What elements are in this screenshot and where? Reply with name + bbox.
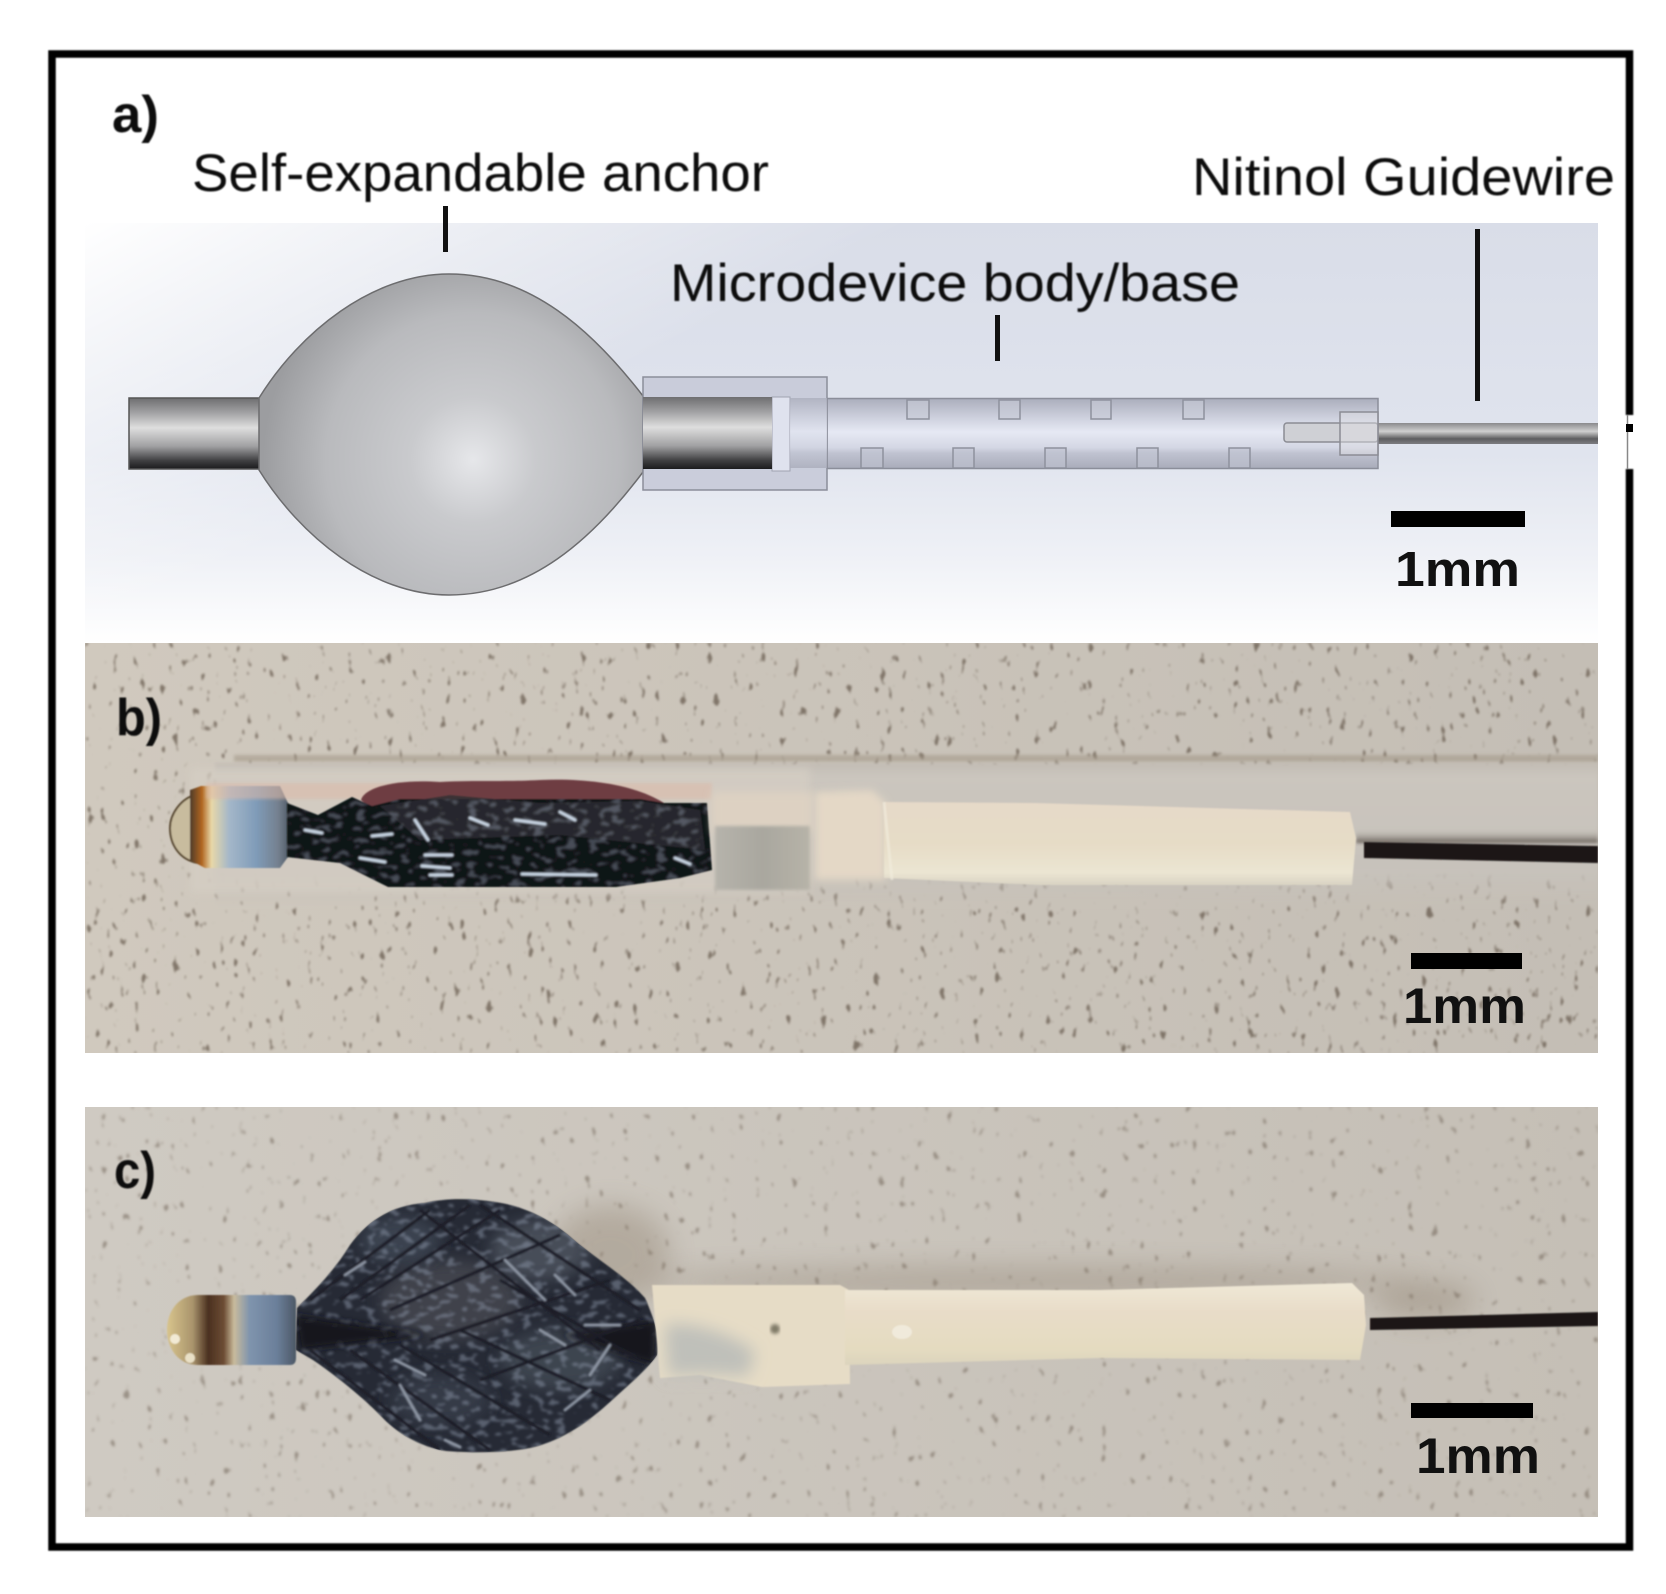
panel a: CAD drawing of the microdevice — [85, 86, 1615, 643]
shadow behind device c — [640, 1268, 1420, 1296]
leader line: anchor — [443, 206, 448, 252]
pink zone — [206, 783, 712, 799]
clear sleeve b — [712, 792, 812, 890]
panel b: photo of the crimped device — [85, 643, 1598, 1053]
panel b label: b) — [116, 689, 162, 747]
label: microdevice body/base: Microdevice body/base — [670, 254, 1240, 313]
printed body c — [652, 1283, 1366, 1387]
tip of device c — [167, 1295, 296, 1365]
tip of device b — [170, 786, 288, 868]
scale bar a: 1mm — [1395, 543, 1520, 597]
Nitinol guidewire — [1284, 412, 1598, 455]
left cylinder of anchor — [129, 398, 260, 469]
socket holding the anchor — [643, 377, 827, 490]
groove line above device — [234, 755, 1598, 762]
crimped mesh b — [285, 775, 715, 890]
scale bar c — [1411, 1403, 1540, 1484]
self-expandable anchor balloon — [259, 274, 643, 595]
label: Nitinol guidewire: Nitinol Guidewire — [1192, 148, 1615, 207]
scale bar a — [1391, 511, 1525, 597]
scale bar b — [1403, 953, 1526, 1034]
panel a label: a) — [112, 86, 159, 144]
leader line: guidewire — [1475, 229, 1480, 401]
expanded mesh anchor c — [290, 1195, 665, 1457]
pale channel behind device — [215, 763, 1598, 908]
printed body b — [815, 790, 1356, 885]
panel c label: c) — [114, 1142, 156, 1200]
side holes: top row — [907, 400, 1204, 419]
microdevice body tube — [827, 398, 1378, 468]
scale bar c: 1mm — [1416, 1428, 1540, 1484]
leader line: body — [995, 315, 1000, 361]
scale bar b: 1mm — [1403, 978, 1526, 1034]
panel c: photo of the expanded device — [85, 1107, 1598, 1517]
guidewire b — [1364, 842, 1598, 863]
guidewire c — [1370, 1312, 1598, 1330]
label: self-expandable anchor: Self-expandable anchor — [192, 144, 769, 203]
side holes: bottom row — [861, 448, 1250, 468]
